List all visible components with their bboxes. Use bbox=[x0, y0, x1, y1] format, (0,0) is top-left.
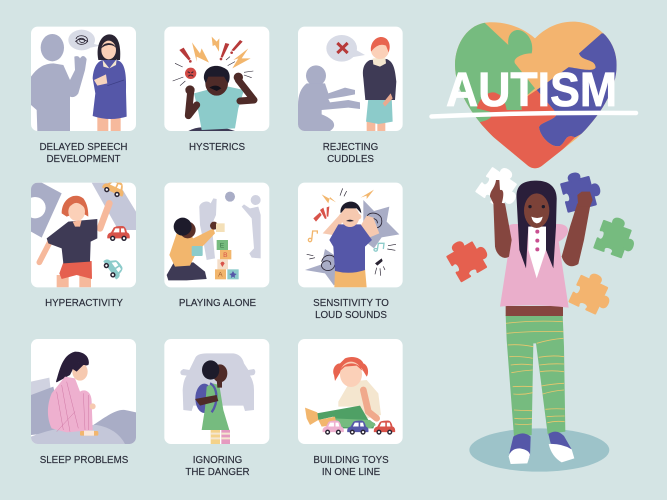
label: rejecting cuddles: REJECTING bbox=[323, 142, 378, 153]
title: AUTISM bbox=[446, 64, 617, 117]
leggings bbox=[506, 315, 565, 437]
left shoe bbox=[509, 433, 531, 457]
panel: playing alone: E bbox=[220, 242, 225, 249]
icon: red puzzle piece bbox=[444, 233, 492, 281]
panel: sensitivity to loud sounds bbox=[298, 183, 403, 287]
panel: delayed speech development bbox=[31, 27, 136, 131]
panel: building toys in one line bbox=[298, 339, 403, 444]
shirt bbox=[500, 224, 569, 308]
icon: white puzzle piece bbox=[476, 162, 526, 212]
panel: ignoring the danger bbox=[164, 339, 269, 444]
floor shadow bbox=[469, 428, 609, 472]
label: hysterics: HYSTERICS bbox=[189, 142, 245, 153]
icon: orange puzzle piece bbox=[570, 270, 616, 316]
label: ignoring the danger: THE DANGER bbox=[185, 467, 250, 478]
panel: sleep problems bbox=[31, 339, 136, 444]
panel: playing alone: B bbox=[223, 252, 228, 259]
shirt bib bbox=[528, 227, 546, 278]
icon: blue puzzle piece bbox=[559, 168, 603, 212]
label: building toys in one line: IN ONE LINE bbox=[322, 467, 381, 478]
belly bbox=[506, 306, 563, 316]
face bbox=[524, 193, 549, 228]
label: playing alone: PLAYING ALONE bbox=[179, 298, 257, 309]
title underline bbox=[432, 113, 636, 116]
label: rejecting cuddles: CUDDLES bbox=[327, 154, 374, 165]
label: hyperactivity: HYPERACTIVITY bbox=[45, 298, 123, 309]
panel: rejecting cuddles bbox=[298, 27, 403, 131]
icon: green puzzle piece bbox=[594, 214, 640, 260]
panel: playing alone bbox=[164, 183, 269, 287]
label: delayed speech development: DEVELOPMENT bbox=[46, 154, 121, 165]
label: ignoring the danger: IGNORING bbox=[193, 455, 242, 466]
left arm bbox=[493, 202, 512, 258]
right arm bbox=[562, 203, 591, 266]
panel: playing alone: A bbox=[218, 272, 223, 279]
heart puzzle bbox=[455, 22, 617, 168]
label: building toys in one line: BUILDING TOYS bbox=[313, 455, 389, 466]
girl figure bbox=[469, 180, 609, 472]
right shoe bbox=[548, 432, 572, 449]
label: delayed speech development: DELAYED SPEECH bbox=[39, 142, 128, 153]
panel: hysterics bbox=[164, 27, 269, 131]
panel: hyperactivity bbox=[31, 182, 136, 288]
label: sleep problems: SLEEP PROBLEMS bbox=[40, 455, 129, 466]
hair bbox=[516, 181, 557, 268]
label: sensitivity to loud sounds: SENSITIVITY TO bbox=[313, 298, 389, 309]
label: sensitivity to loud sounds: LOUD SOUNDS bbox=[315, 310, 387, 321]
